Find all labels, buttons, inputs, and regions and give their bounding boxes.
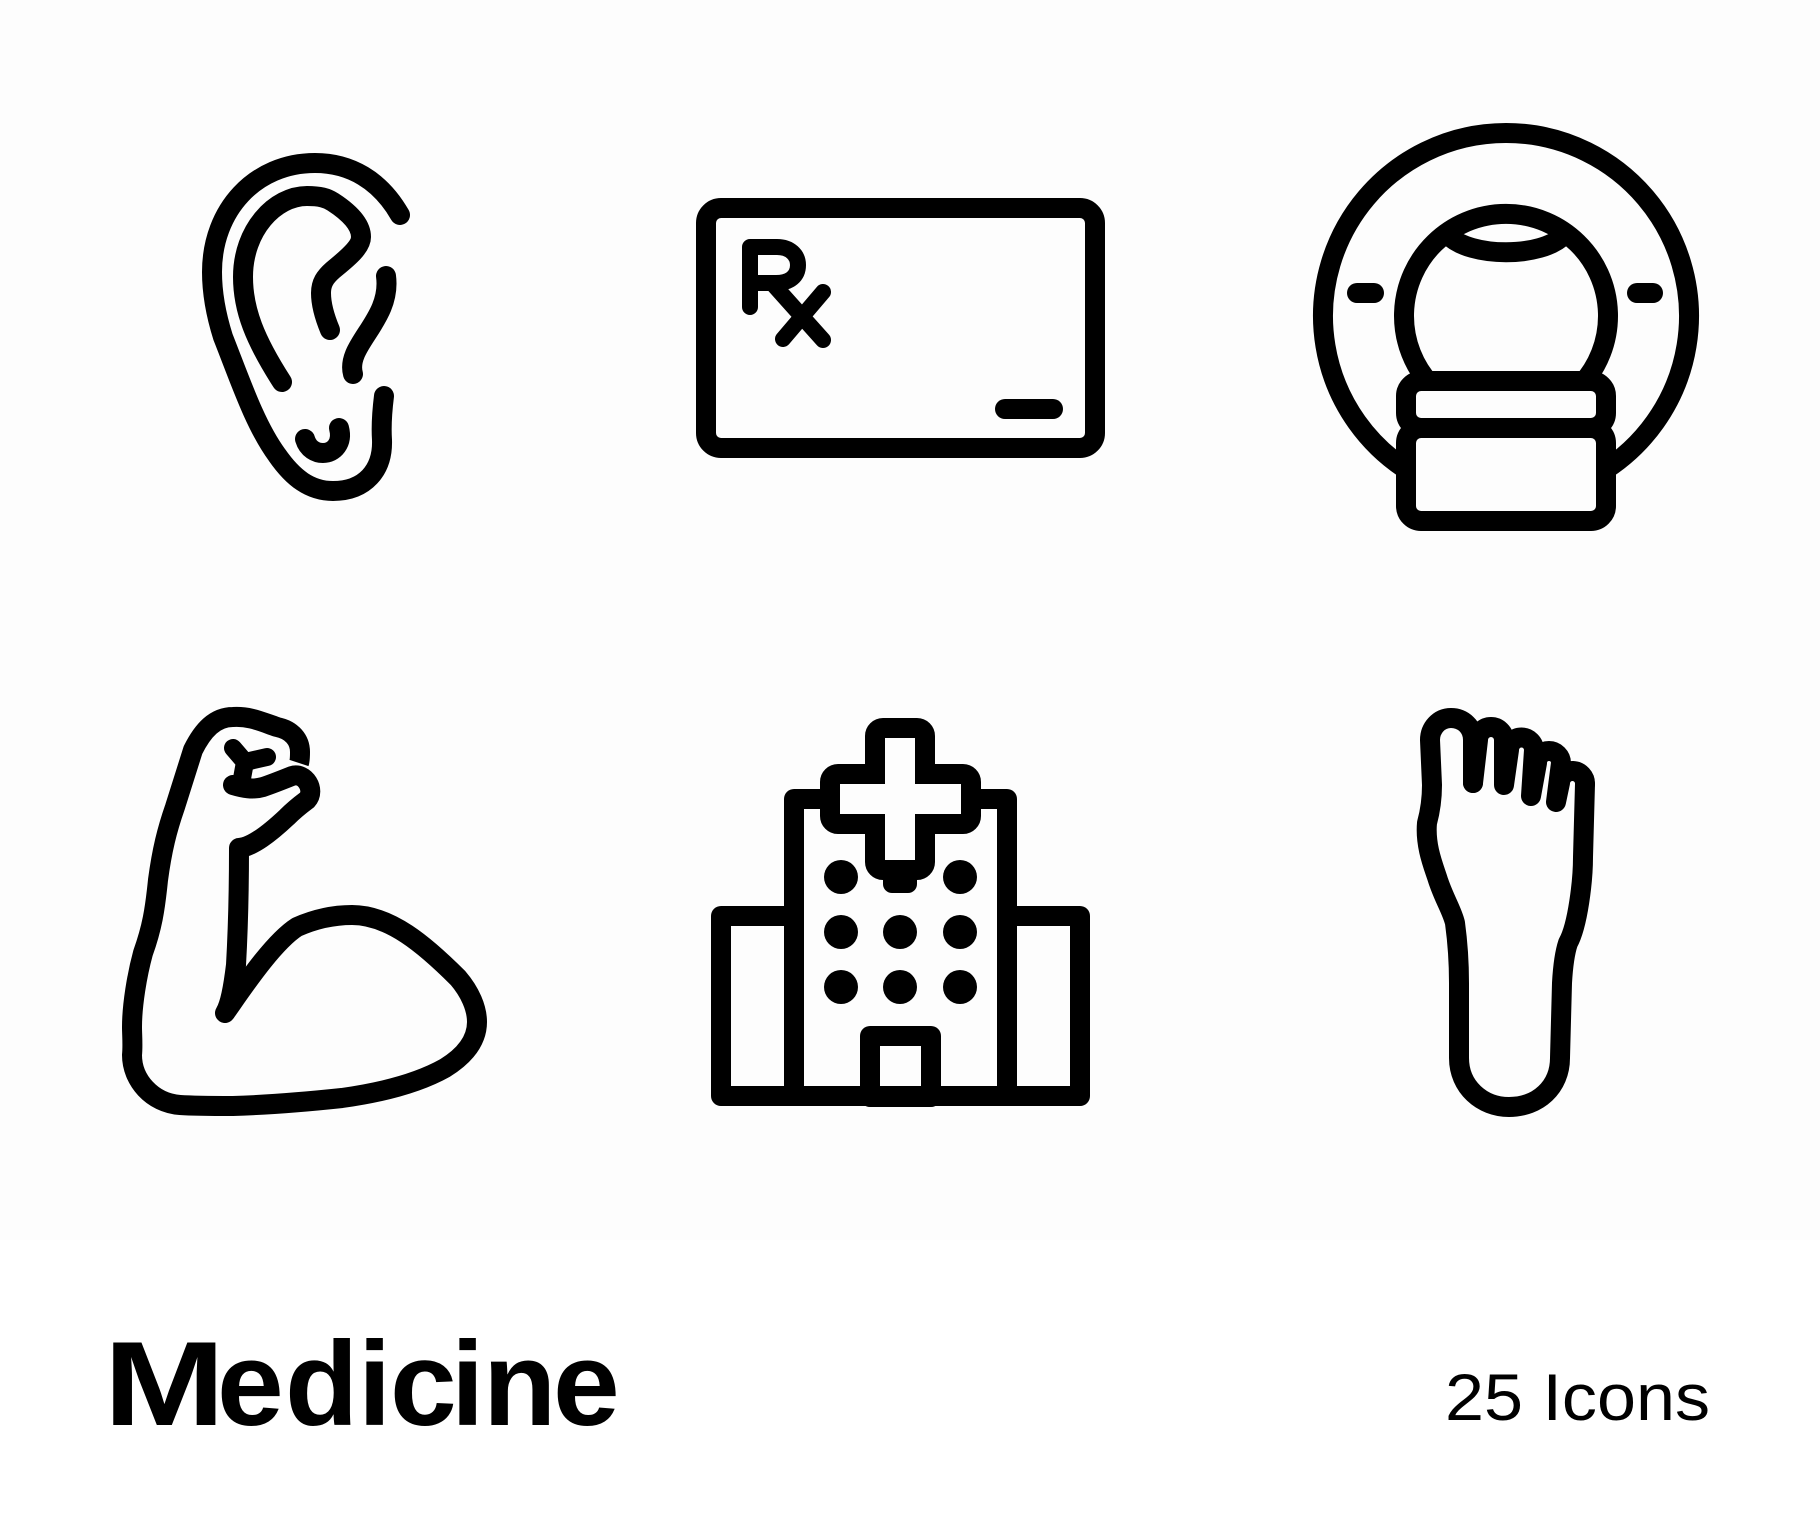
heading: Medicine: M [104, 1317, 225, 1451]
icon: prescription card [706, 208, 1095, 448]
icon: foot [1427, 718, 1585, 1107]
icon: CT scanner [1323, 133, 1689, 521]
icon: ear [212, 163, 400, 491]
panel: footer band [104, 1317, 1710, 1451]
icon: hospital building [721, 728, 1080, 1097]
text: icon count: 25 Icons [1445, 1360, 1710, 1434]
heading: Medicine: edicine [217, 1317, 620, 1451]
icon: flexed arm [132, 717, 477, 1106]
